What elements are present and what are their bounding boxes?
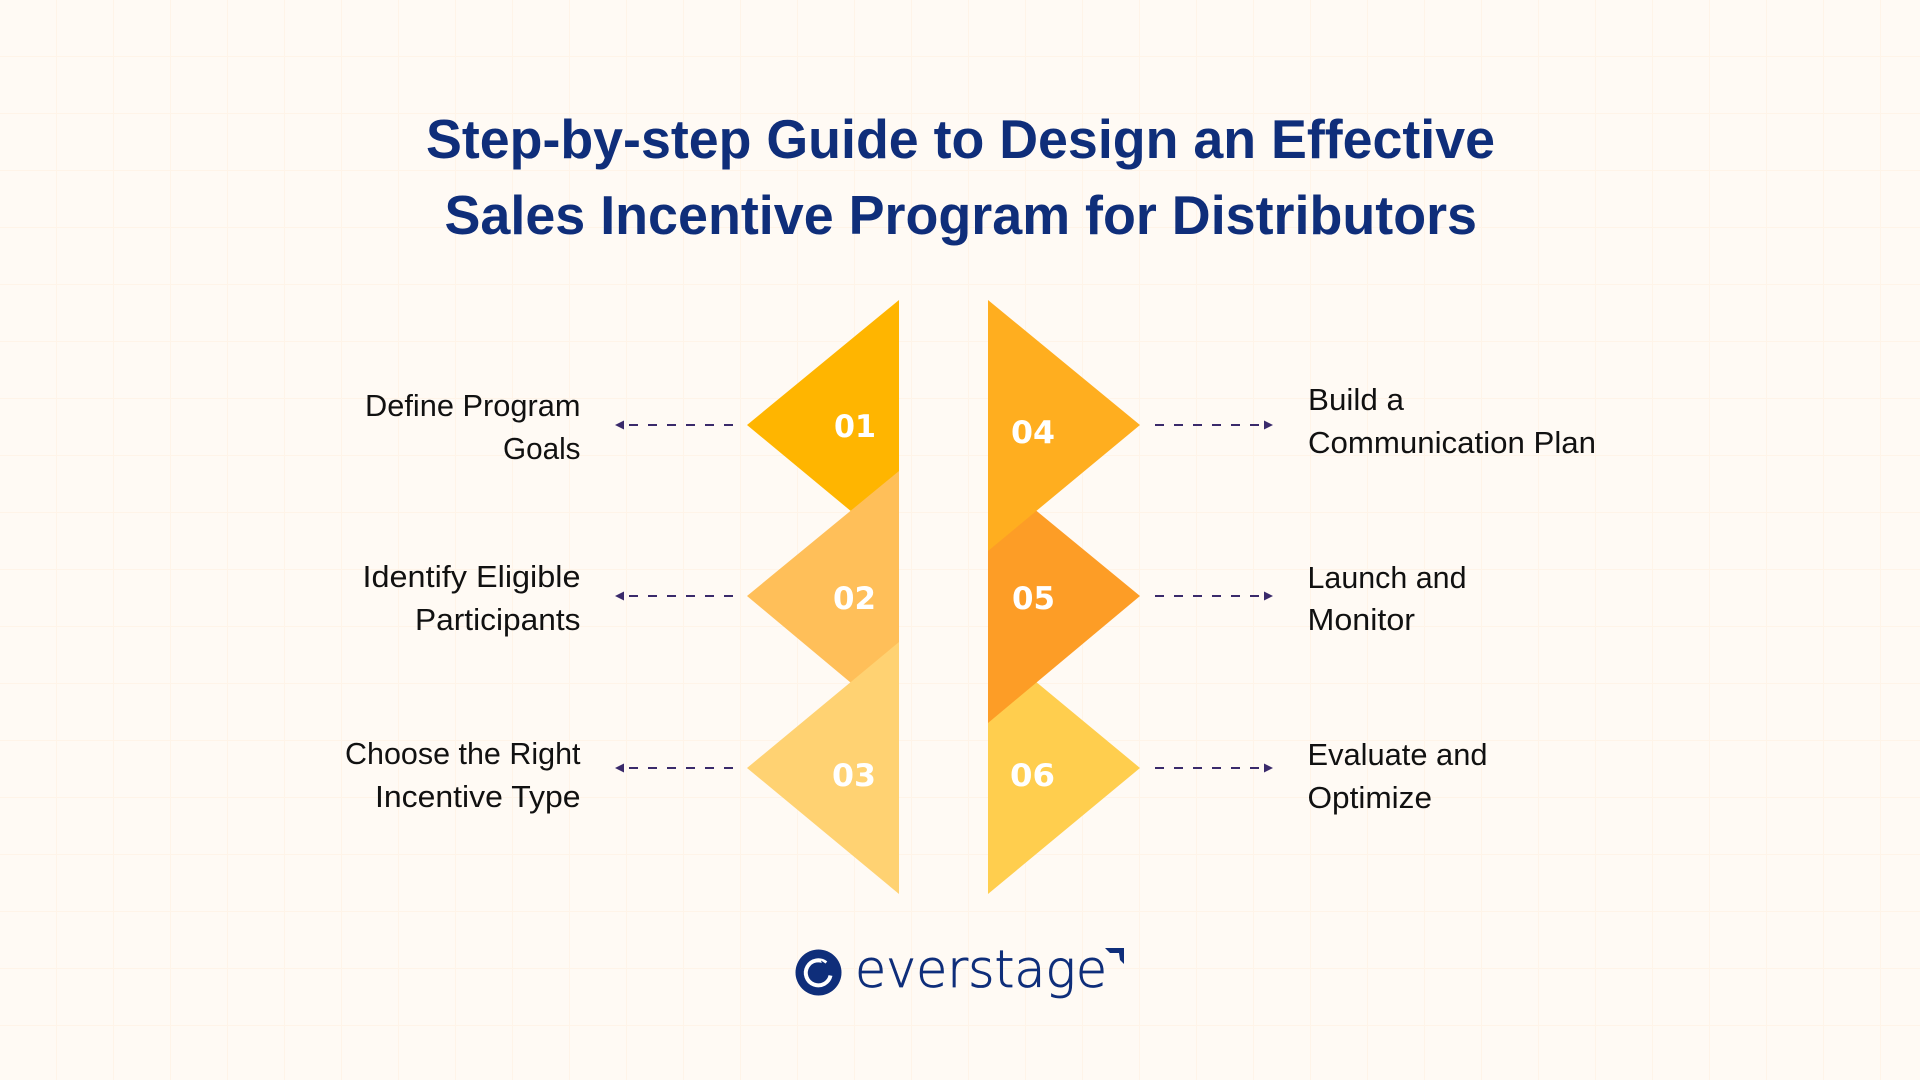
triangle 04 [988, 300, 1140, 551]
step numbers: 02 [833, 581, 876, 617]
step numbers: 01 [834, 409, 876, 445]
title: Sales Incentive Program for Distributors [444, 184, 1477, 246]
triangle 05 [988, 471, 1140, 723]
label: Launch and Monitor [1308, 560, 1466, 637]
title [426, 108, 1495, 246]
triangle 02 [747, 471, 899, 723]
arrow: step 03 [615, 764, 733, 772]
icon: logo mark [796, 950, 842, 996]
label: Evaluate and Optimize: Optimize [1308, 780, 1432, 815]
label: Identify Eligible Participants [362, 559, 580, 637]
label: Launch and Monitor: Launch and [1308, 560, 1466, 595]
logo: everstage [796, 940, 1124, 1000]
step numbers: 05 [1012, 581, 1055, 617]
label: Build a Communication Plan: Build a [1308, 382, 1405, 417]
label: Build a Communication Plan [1308, 382, 1596, 460]
arrow: step 06 [1155, 764, 1273, 772]
triangle 06 [988, 642, 1140, 894]
step numbers: 03 [832, 758, 876, 794]
right triangle stack [988, 300, 1140, 894]
step numbers: 06 [1010, 758, 1055, 794]
label: Define Program Goals: Define Program [365, 388, 580, 423]
arrow: step 04 [1155, 420, 1273, 430]
label: Define Program Goals: Goals [503, 431, 580, 466]
label: Choose the Right Incentive Type: Incentive Type [375, 779, 580, 814]
title: Step-by-step Guide to Design an Effective [426, 108, 1495, 170]
arrow: step 02 [615, 592, 733, 600]
label: Evaluate and Optimize: Evaluate and [1308, 737, 1488, 772]
triangle 03 [747, 642, 899, 894]
label: Choose the Right Incentive Type [345, 736, 581, 814]
step numbers [832, 409, 1055, 794]
label: Identify Eligible Participants: Identify Eligible [362, 559, 580, 594]
icon: logo corner mark [1105, 948, 1124, 964]
label: Define Program Goals [365, 388, 580, 466]
left triangle stack [747, 300, 899, 894]
label: Choose the Right Incentive Type: Choose the Right [345, 736, 581, 771]
label: Evaluate and Optimize [1308, 737, 1488, 815]
arrow: step 01 [615, 420, 733, 430]
label: Build a Communication Plan: Communication Plan [1308, 425, 1596, 460]
logo wordmark: everstage [855, 940, 1107, 1000]
label: Identify Eligible Participants: Participants [415, 602, 580, 637]
triangle 01 [747, 300, 899, 551]
arrow: step 05 [1155, 592, 1273, 600]
step numbers: 04 [1011, 415, 1055, 451]
label: Launch and Monitor: Monitor [1308, 602, 1415, 637]
